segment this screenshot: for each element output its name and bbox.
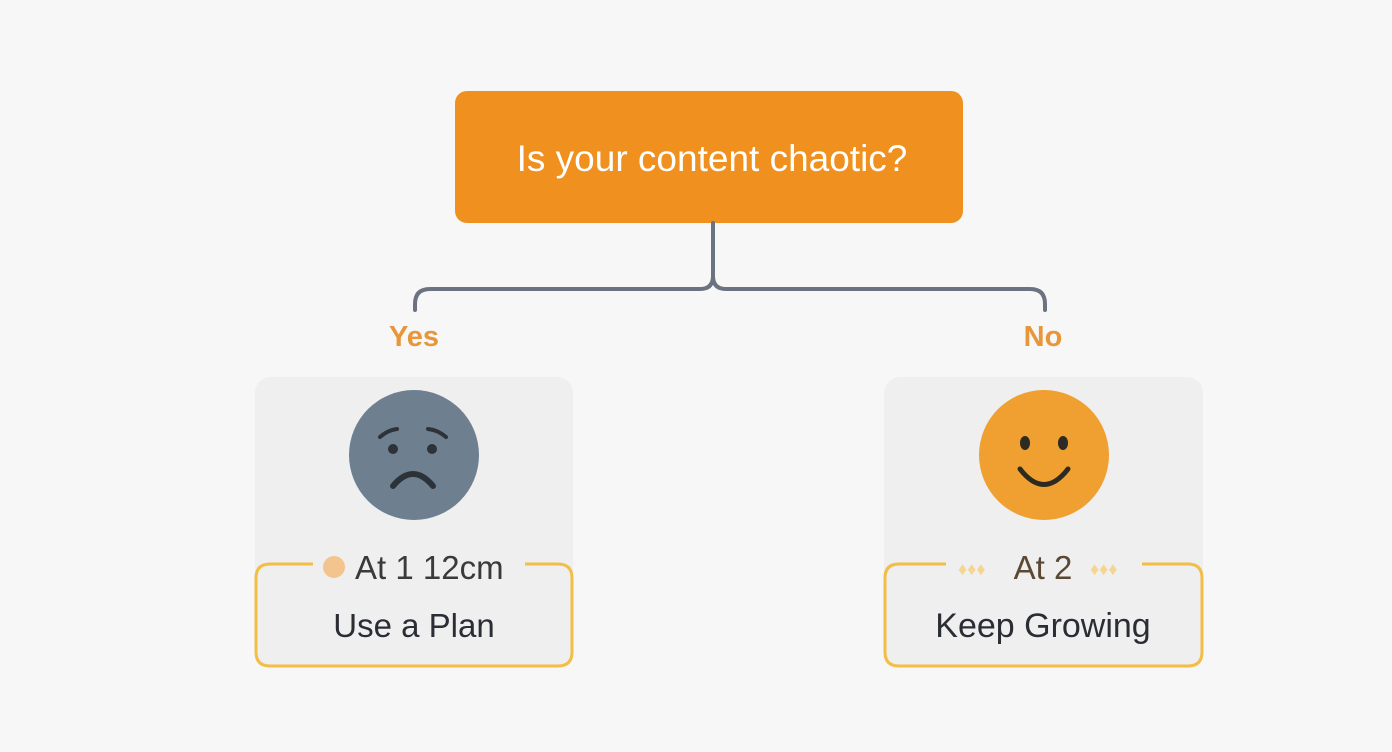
callout: Use a Plan: At 1 12cm <box>355 549 504 586</box>
callout: Keep Growing <box>885 549 1202 666</box>
connector arrows <box>415 223 1045 310</box>
question box <box>455 91 963 223</box>
panel: no outcome <box>884 377 1203 667</box>
callout: Keep Growing: ♦♦♦ <box>1090 559 1118 579</box>
callout: Use a Plan: Use a Plan <box>333 607 495 644</box>
question box: Is your content chaotic? <box>517 138 907 179</box>
icon: happy face <box>979 390 1109 520</box>
label: No: No <box>1024 321 1062 353</box>
callout: Use a Plan <box>256 549 572 666</box>
panel: yes outcome <box>255 377 573 667</box>
callout: Keep Growing: ♦♦♦ <box>958 559 986 579</box>
icon: sad face <box>349 390 479 520</box>
callout: Keep Growing: Keep Growing <box>935 607 1151 645</box>
callout: Keep Growing: At 2 <box>1014 549 1072 586</box>
label: Yes: Yes <box>389 321 439 353</box>
